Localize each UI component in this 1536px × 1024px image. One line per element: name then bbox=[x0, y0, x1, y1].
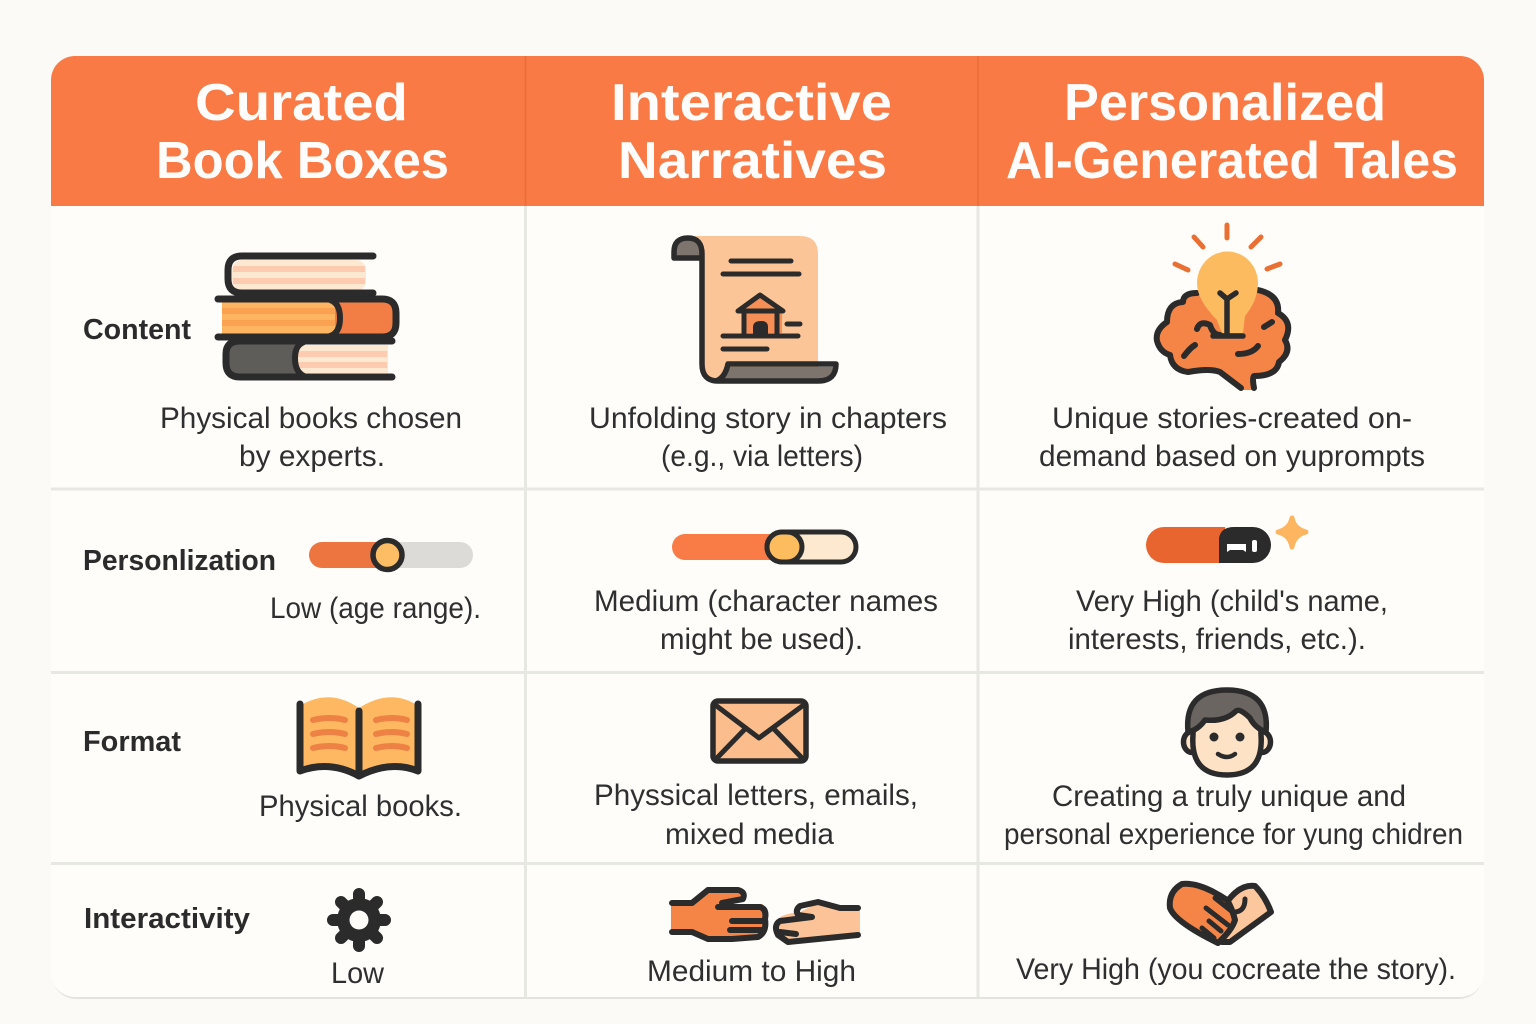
text: medium personalization: Medium (character names bbox=[594, 585, 938, 618]
icon: brain with lightbulb bbox=[1157, 225, 1289, 390]
header: Personalized AI-Generated Tales bbox=[1006, 74, 1458, 190]
header: Interactive Narratives: Narratives bbox=[618, 132, 887, 190]
header: Curated Book Boxes: Book Boxes bbox=[156, 132, 449, 190]
text: content of book boxes bbox=[160, 402, 462, 473]
text: very high personalization: Very High (child's name, bbox=[1076, 585, 1388, 618]
text: unique experience bbox=[1004, 780, 1463, 851]
text: content of interactive narratives: Unfolding story in chapters bbox=[589, 402, 947, 435]
header: Curated Book Boxes bbox=[156, 74, 449, 190]
icon: clasped hands heart bbox=[1170, 884, 1271, 943]
text: content of interactive narratives bbox=[589, 402, 947, 473]
text: medium to high: Medium to High bbox=[647, 955, 856, 988]
text: content of interactive narratives: (e.g., via letters) bbox=[661, 440, 863, 473]
icon: reaching hands bbox=[671, 890, 860, 942]
text: medium personalization bbox=[594, 585, 938, 656]
text: very high personalization: interests, friends, etc.). bbox=[1068, 623, 1366, 656]
row label: Interactivity: Interactivity bbox=[84, 903, 250, 935]
header: Interactive Narratives: Interactive bbox=[611, 74, 892, 132]
text: content of AI tales: demand based on yuprompts bbox=[1039, 440, 1425, 473]
icon: scroll with house bbox=[674, 236, 836, 381]
text: letters and emails: Physsical letters, emails, bbox=[594, 779, 918, 812]
text: unique experience: Creating a truly unique and bbox=[1052, 780, 1406, 813]
header: Personalized AI-Generated Tales: AI-Generated Tales bbox=[1006, 132, 1458, 190]
text: very high interactivity: Very High (you cocreate the story). bbox=[1016, 953, 1456, 986]
icon: low slider bbox=[309, 540, 473, 570]
icon: stack of books bbox=[218, 256, 396, 377]
text: very high personalization bbox=[1068, 585, 1388, 656]
text: content of book boxes: Physical books chosen bbox=[160, 402, 462, 435]
icon: open book bbox=[300, 697, 418, 776]
text: physical books: Physical books. bbox=[259, 790, 462, 823]
icon: gear bbox=[333, 894, 385, 946]
icon: child face bbox=[1184, 690, 1270, 775]
text: medium personalization: might be used). bbox=[660, 623, 863, 656]
text: content of AI tales bbox=[1039, 402, 1425, 473]
header: Curated Book Boxes: Curated bbox=[195, 74, 408, 132]
icon: very high slider with sparkle bbox=[1146, 518, 1306, 563]
icon: medium slider bbox=[672, 532, 856, 562]
icon: envelope bbox=[713, 701, 806, 761]
text: unique experience: personal experience for yung chidren bbox=[1004, 818, 1463, 851]
text: content of book boxes: by experts. bbox=[239, 440, 385, 473]
text: letters and emails bbox=[594, 779, 918, 851]
text: low interactivity: Low bbox=[331, 957, 384, 990]
row label: Format: Format bbox=[83, 726, 181, 758]
row label: Personlization: Personlization bbox=[83, 545, 276, 577]
header: Personalized AI-Generated Tales: Personalized bbox=[1064, 74, 1386, 132]
header: Interactive Narratives bbox=[611, 74, 892, 190]
text: letters and emails: mixed media bbox=[665, 818, 834, 851]
row label: Content: Content bbox=[83, 314, 191, 346]
text: low personalization: Low (age range). bbox=[270, 592, 481, 625]
text: content of AI tales: Unique stories-created on- bbox=[1052, 402, 1412, 435]
